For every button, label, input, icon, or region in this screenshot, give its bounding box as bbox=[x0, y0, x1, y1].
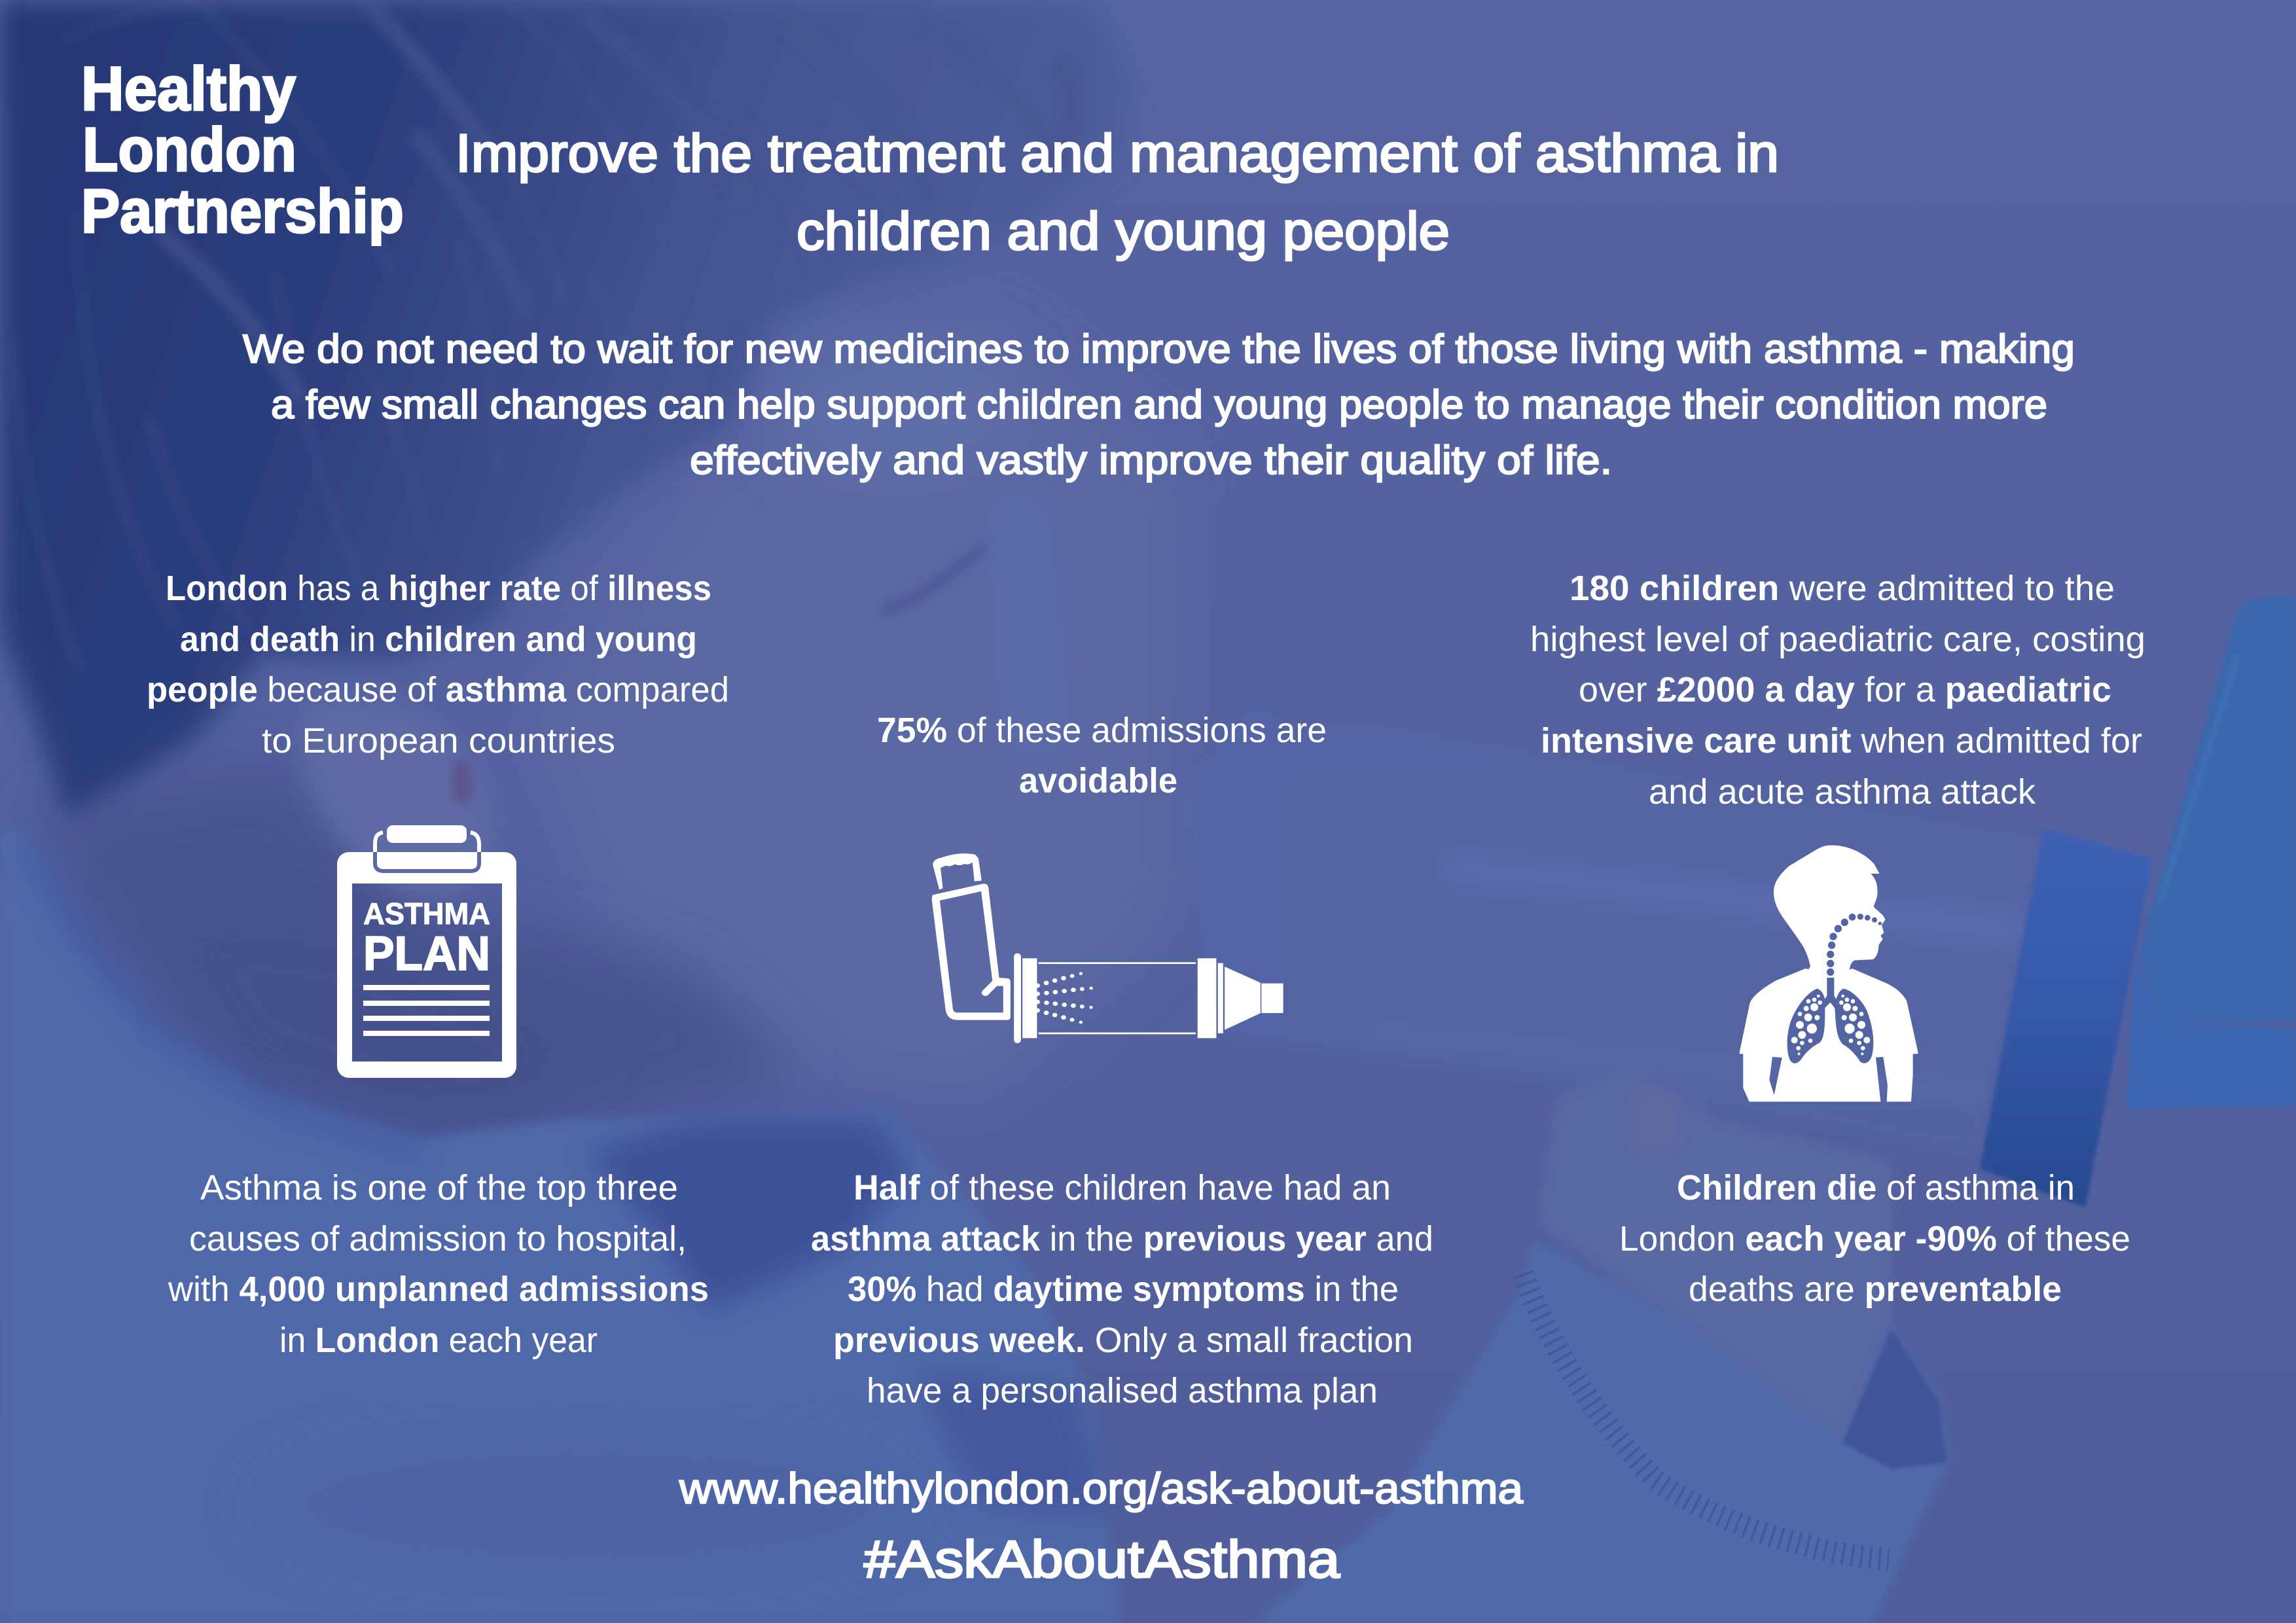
hair strands bbox=[13, 0, 1072, 668]
intro paragraph: We do not need to wait for new medicines to improve the lives of those living with asthma - making bbox=[243, 327, 2075, 371]
inhaler body bbox=[2138, 596, 2296, 1022]
logo: Healthy London Partnership: London bbox=[82, 115, 296, 185]
text block: 180 children: and acute asthma attack bbox=[1649, 772, 2036, 812]
text block: 180 children bbox=[1530, 569, 2145, 812]
text block: London comparison: to European countries bbox=[262, 721, 615, 760]
text block: 75% avoidable bbox=[877, 711, 1327, 800]
title: Improve the treatment and management of asthma in bbox=[456, 124, 1779, 183]
text block: half of these children: 30% had daytime symptoms in the bbox=[848, 1270, 1399, 1309]
icon: asthma plan clipboard: PLAN bbox=[363, 927, 490, 980]
ear bbox=[304, 701, 492, 897]
text block: 180 children: 180 children were admitted to the bbox=[1570, 569, 2115, 608]
title: children and young people bbox=[797, 202, 1450, 261]
icon: asthma plan clipboard: ASTHMA bbox=[363, 897, 490, 931]
text block: 180 children: over £2000 a day for a paediatric bbox=[1579, 670, 2111, 709]
text block: top three causes: with 4,000 unplanned admissions bbox=[168, 1270, 709, 1309]
sweater bbox=[0, 825, 1122, 1623]
text block: London comparison bbox=[147, 569, 729, 760]
neck bbox=[39, 766, 798, 1139]
spacer ring bbox=[1980, 829, 2153, 1207]
text block: 180 children: highest level of paediatric care, costing bbox=[1530, 620, 2145, 659]
sleeve cuff bbox=[1255, 1240, 1947, 1623]
text block: top three causes bbox=[168, 1168, 709, 1360]
intro paragraph: effectively and vastly improve their quality of life. bbox=[690, 438, 1612, 482]
text block: top three causes: in London each year bbox=[279, 1321, 598, 1360]
text block: 180 children: intensive care unit when admitted for bbox=[1541, 721, 2142, 760]
eye bbox=[880, 544, 988, 612]
text block: half of these children: previous week. Only a small fraction bbox=[833, 1321, 1413, 1360]
text block: half of these children bbox=[811, 1168, 1433, 1410]
text block: top three causes: Asthma is one of the top three bbox=[200, 1168, 678, 1207]
lungs bbox=[1787, 914, 1882, 1063]
title bbox=[456, 124, 1779, 261]
spacer tube bbox=[1178, 726, 2044, 1155]
text block: half of these children: have a personalised asthma plan bbox=[867, 1371, 1378, 1410]
text block: top three causes: causes of admission to hospital, bbox=[189, 1219, 687, 1258]
footer link: www.healthylondon.org/ask-about-asthma bbox=[679, 1464, 1523, 1512]
icon: asthma plan clipboard bbox=[337, 825, 516, 1078]
icon: child with lungs silhouette bbox=[1739, 846, 1918, 1101]
logo: Healthy London Partnership bbox=[81, 54, 404, 246]
logo: Healthy London Partnership: Partnership bbox=[81, 177, 404, 246]
logo: Healthy London Partnership: Healthy bbox=[81, 54, 296, 124]
text block: London comparison: London has a higher rate of illness bbox=[166, 569, 711, 608]
face bbox=[524, 314, 1178, 1099]
text block: children die of asthma: London each year -90% of these bbox=[1619, 1219, 2130, 1258]
text block: London comparison: and death in children and young bbox=[180, 620, 697, 659]
text block: children die of asthma: Children die of asthma in bbox=[1677, 1168, 2075, 1207]
light brow patch bbox=[766, 334, 1028, 478]
footer hashtag: #AskAboutAsthma bbox=[864, 1530, 1340, 1588]
mask edge bbox=[988, 497, 1073, 753]
intro paragraph: a few small changes can help support children and young people to manage their condition more bbox=[271, 382, 2047, 427]
text block: half of these children: Half of these children have had an bbox=[853, 1168, 1391, 1207]
text block: London comparison: people because of asthma compared bbox=[147, 670, 729, 709]
text block: children die of asthma: deaths are preventable bbox=[1689, 1270, 2062, 1309]
hair bbox=[0, 0, 1130, 818]
icon: inhaler and spacer bbox=[932, 853, 1283, 1043]
text block: 75% avoidable: 75% of these admissions are bbox=[877, 711, 1327, 750]
text block: children die of asthma bbox=[1619, 1168, 2130, 1309]
hand and thumb bbox=[1538, 1063, 1892, 1443]
intro paragraph bbox=[243, 327, 2075, 482]
text block: 75% avoidable: avoidable bbox=[1019, 761, 1177, 800]
text block: half of these children: asthma attack in the previous year and bbox=[811, 1219, 1433, 1258]
